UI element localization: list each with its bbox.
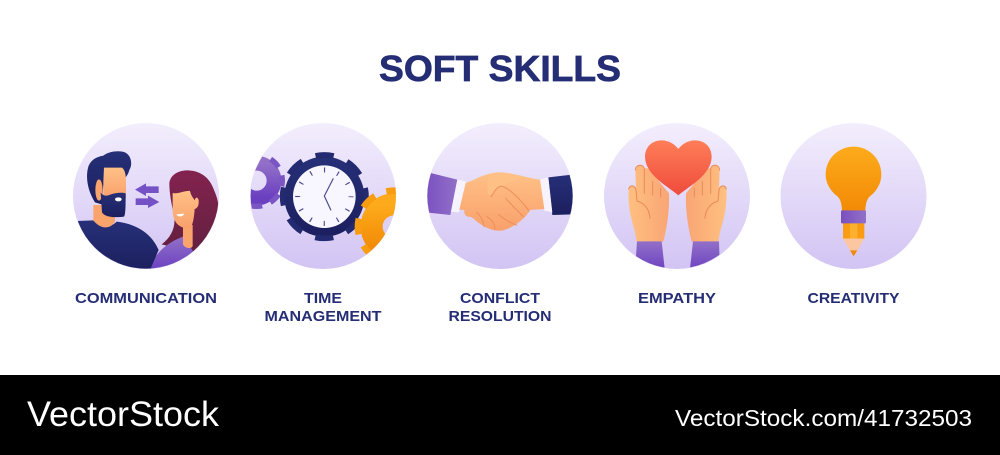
arrow: right xyxy=(136,196,159,208)
heart xyxy=(645,140,712,195)
bulb xyxy=(826,147,881,211)
circle background: conflict resolution xyxy=(427,123,573,269)
woman hair xyxy=(162,170,219,252)
left hand xyxy=(628,165,669,242)
clock hands xyxy=(324,178,333,210)
man body xyxy=(77,220,159,272)
illustration: lightbulb pencil xyxy=(826,147,881,256)
right cuff xyxy=(690,241,720,268)
circle background: communication xyxy=(73,123,219,269)
navy gear xyxy=(283,155,366,238)
hands xyxy=(459,172,544,231)
footer logo: VectorStock xyxy=(27,395,220,434)
footer url: VectorStock.com/41732503 xyxy=(675,405,972,431)
purple gear xyxy=(250,156,285,209)
woman body xyxy=(150,236,193,269)
man hair xyxy=(87,151,131,204)
woman face xyxy=(173,191,199,228)
pencil stripe xyxy=(850,222,857,239)
label: conflict resolution: RESOLUTION xyxy=(448,308,552,325)
arrow: left xyxy=(135,183,159,196)
man face xyxy=(103,168,126,198)
woman neck xyxy=(183,225,193,248)
man beard xyxy=(101,192,126,217)
footer bar xyxy=(0,375,1000,455)
panel: creativity xyxy=(780,123,926,307)
man neck xyxy=(93,205,115,227)
thumb xyxy=(488,172,512,195)
circle background: time management xyxy=(250,123,396,269)
label: communication: COMMUNICATION xyxy=(75,290,217,307)
right sleeve xyxy=(548,174,575,215)
clock ticks xyxy=(298,170,351,223)
pencil body xyxy=(843,222,864,239)
man ear xyxy=(95,179,103,201)
man mouth xyxy=(115,197,122,201)
panel: time management xyxy=(250,123,396,321)
label: time management xyxy=(264,290,382,325)
circle background: creativity xyxy=(780,123,926,269)
illustration: hands with heart xyxy=(628,140,727,272)
label: time management: TIME xyxy=(304,290,342,307)
illustration: handshake xyxy=(425,172,575,231)
panel: empathy xyxy=(604,123,750,307)
band xyxy=(841,210,866,223)
clock face xyxy=(293,165,356,228)
label: creativity: CREATIVITY xyxy=(808,290,900,307)
orange gear xyxy=(354,187,396,255)
pencil lead xyxy=(850,250,857,256)
woman smile xyxy=(176,214,184,217)
title: SOFT SKILLS xyxy=(379,48,621,89)
label: time management: MANAGEMENT xyxy=(264,308,382,325)
finger lines xyxy=(477,186,529,229)
palm lines xyxy=(629,165,726,218)
right hand xyxy=(686,165,727,242)
label: empathy: EMPATHY xyxy=(638,290,716,307)
pencil tip wood xyxy=(843,239,864,250)
panel: communication xyxy=(73,123,219,307)
label: conflict resolution xyxy=(448,290,552,325)
illustration: clock gear xyxy=(250,152,396,255)
left sleeve xyxy=(425,172,457,215)
left cuff xyxy=(636,241,664,268)
right cuff xyxy=(540,177,552,212)
circle background: empathy xyxy=(604,123,750,269)
illustration: two people talking xyxy=(77,151,219,272)
left cuff xyxy=(451,180,466,212)
label: conflict resolution: CONFLICT xyxy=(460,290,540,307)
panel: conflict resolution xyxy=(425,123,575,325)
